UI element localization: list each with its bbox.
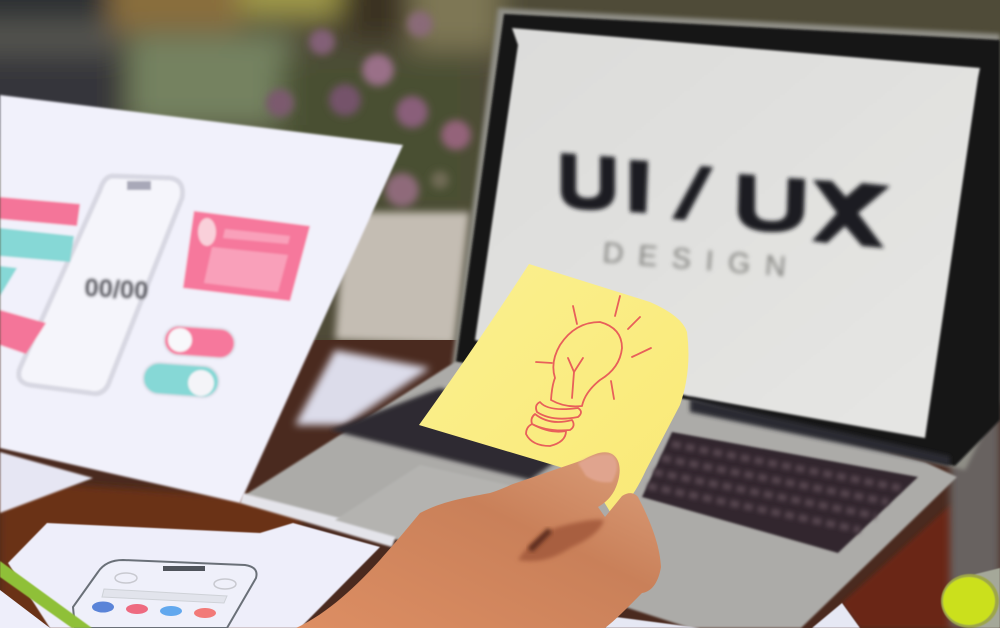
keyboard	[642, 432, 918, 553]
phone code label: 00/00	[84, 274, 149, 305]
green highlighter, bottom right	[941, 568, 1000, 628]
keyboard left part	[330, 388, 600, 480]
small phone wireframe	[73, 560, 257, 628]
hand holding note	[296, 452, 661, 628]
trackpad	[335, 465, 530, 558]
background paper on table	[295, 350, 430, 425]
pink card	[183, 211, 310, 301]
green pen, bottom left	[0, 561, 92, 628]
colored dots	[92, 602, 114, 612]
light bulb sketch	[526, 296, 651, 446]
screen headline	[561, 153, 890, 248]
phone outline	[19, 176, 182, 394]
pink toggle	[163, 325, 236, 359]
hinge strip	[690, 398, 950, 466]
background flower pot	[335, 212, 470, 345]
lower paper with phone sketch	[0, 523, 860, 628]
laptop base	[245, 362, 957, 628]
wooden table	[0, 340, 1000, 628]
thumb nail	[578, 454, 617, 482]
background flowers	[266, 11, 471, 207]
laptop lid	[452, 8, 1000, 470]
laptop	[240, 8, 1000, 628]
paper wireframe, left	[0, 95, 403, 513]
sticky note	[419, 264, 688, 516]
front edge strip	[240, 493, 397, 547]
teal toggle	[142, 361, 220, 399]
screen subheading: DESIGN	[601, 237, 802, 285]
lower-right paper scrap	[812, 603, 860, 628]
blurred background	[0, 0, 1000, 360]
laptop screen	[475, 28, 980, 438]
pink and teal bars	[0, 197, 80, 226]
keys	[648, 444, 900, 530]
finger creases	[518, 520, 604, 561]
